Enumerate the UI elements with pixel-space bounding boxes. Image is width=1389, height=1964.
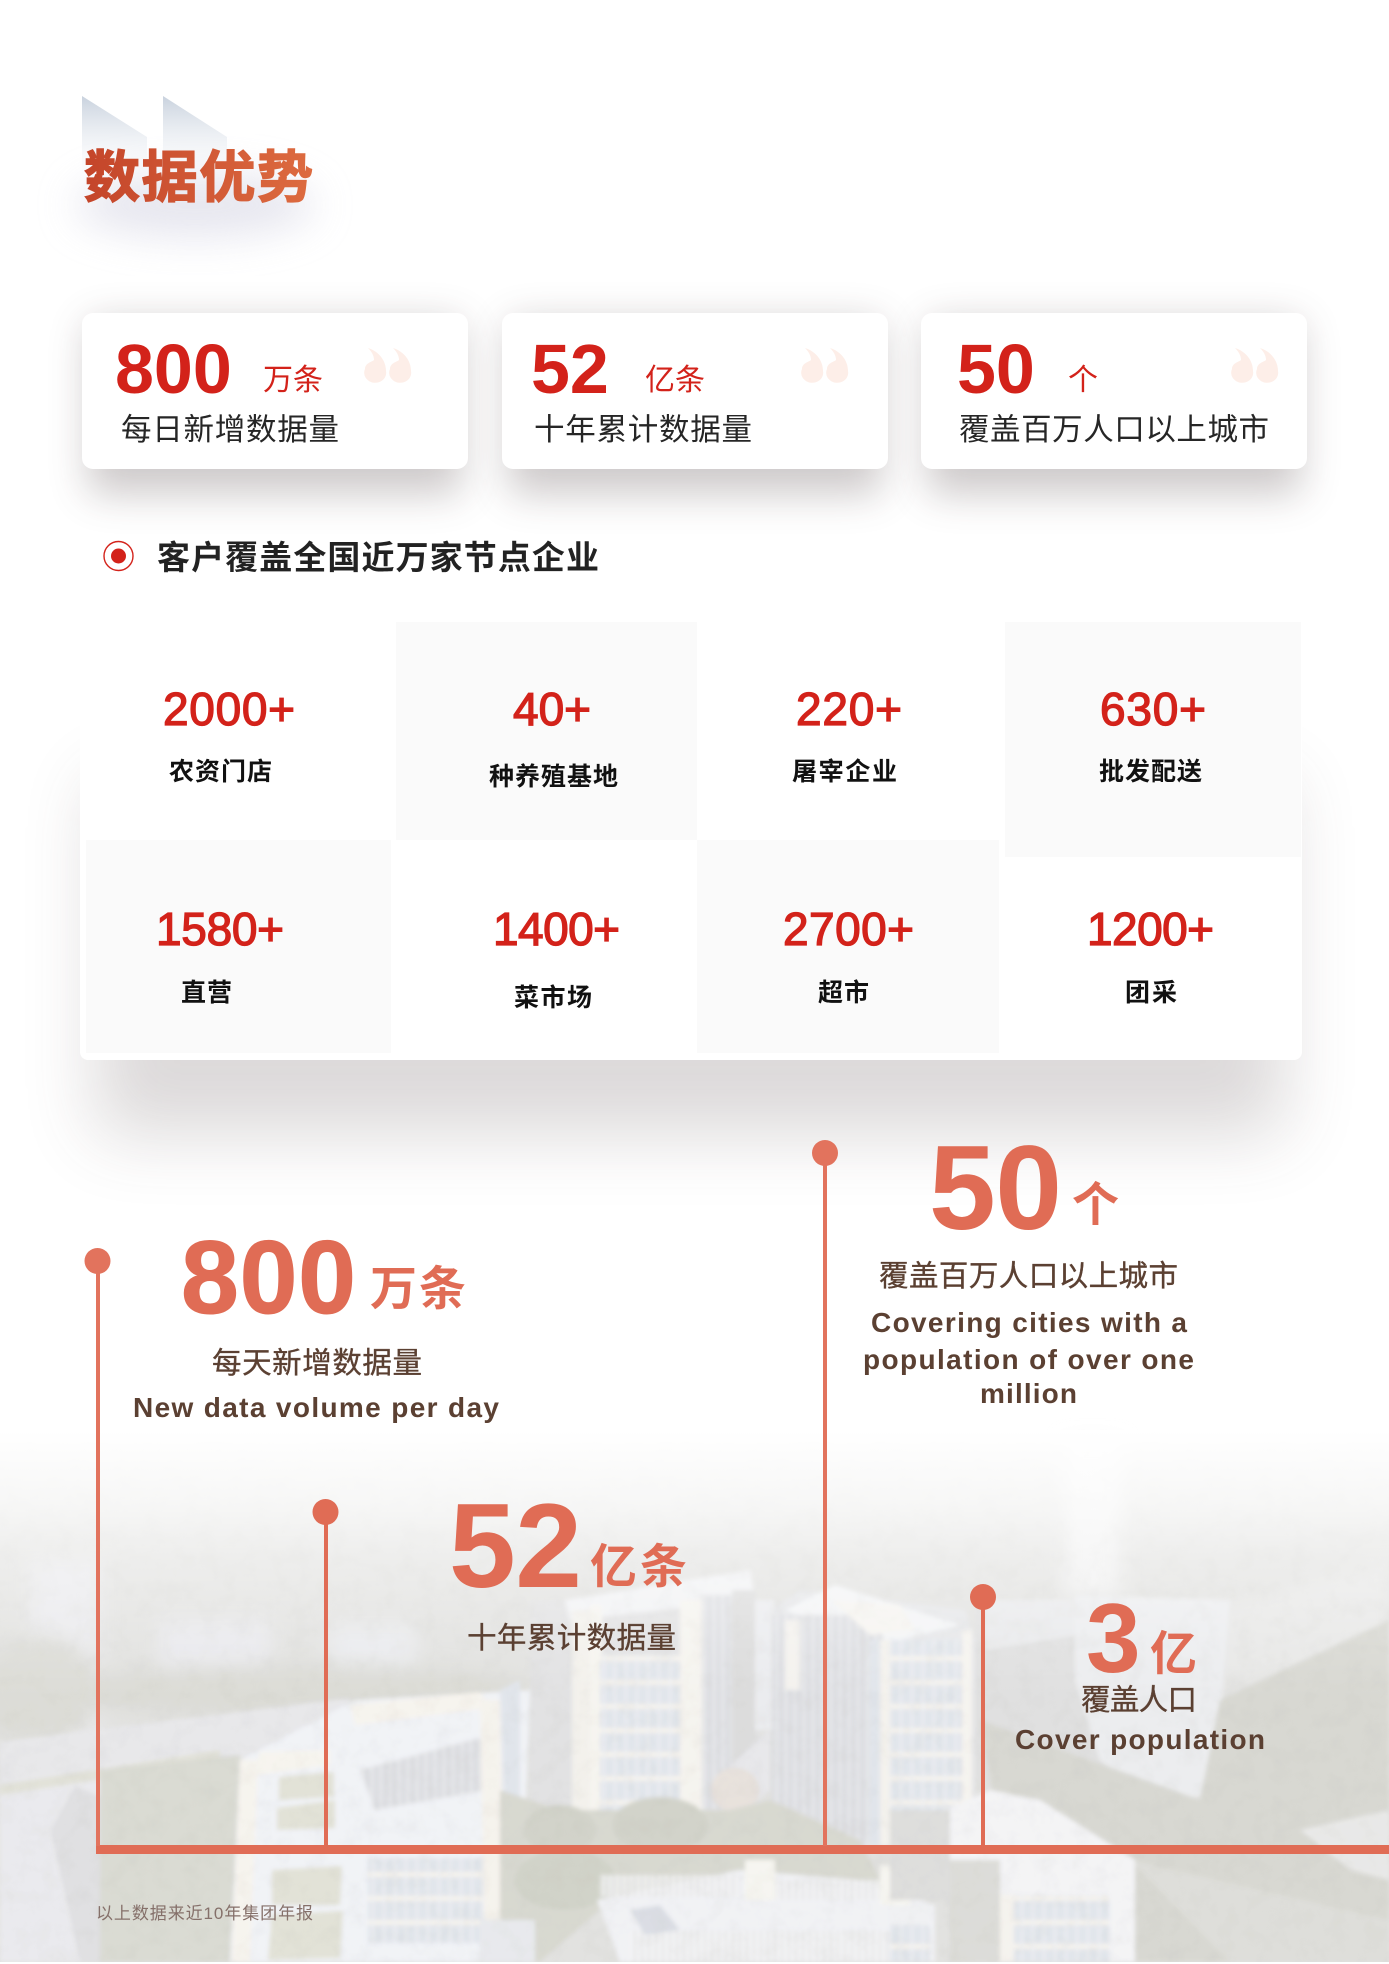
- caption en: Covering cities with a: [871, 1307, 1187, 1338]
- cell: 屠宰企业: 220+: [796, 683, 902, 735]
- stat number: 52: [531, 330, 609, 408]
- cell: 屠宰企业: [792, 683, 902, 786]
- card label: 覆盖百万人口以上城市: [959, 413, 1269, 447]
- big number: 52: [449, 1479, 582, 1613]
- caption cn: 覆盖百万人口以上城市: [879, 1260, 1178, 1293]
- cell: 屠宰企业: 屠宰企业: [792, 757, 897, 786]
- caption en: Cover population: [1015, 1724, 1265, 1755]
- stat: 3亿: [1015, 1583, 1265, 1755]
- low building: [230, 1690, 530, 1962]
- caption cn: 覆盖人口: [1081, 1684, 1197, 1717]
- stat number: 50: [957, 330, 1035, 408]
- caption en: New data volume per day: [133, 1392, 499, 1423]
- unit: 万条: [263, 364, 323, 397]
- footnote: 以上数据来近10年集团年报: [96, 1904, 313, 1923]
- road: [0, 1698, 360, 1785]
- panel: card 800万条: [82, 313, 468, 469]
- right trees: [980, 1620, 1389, 1962]
- lower left tower: [0, 1780, 130, 1962]
- card label: 每日新增数据量: [121, 413, 339, 447]
- cell: 农资门店: [163, 683, 295, 786]
- cell: 种养殖基地: [489, 683, 618, 791]
- marker: 3: [970, 1584, 996, 1846]
- panel: enterprise coverage grid: [80, 622, 1302, 1060]
- cell: 批发配送: 630+: [1100, 683, 1206, 735]
- cell: 农资门店: 2000+: [163, 683, 295, 735]
- cell: 团采: 团采: [1125, 979, 1177, 1007]
- stat: 50个: [863, 1121, 1194, 1409]
- icon: quote mark: [1231, 348, 1278, 383]
- stat: 800万条: [133, 1220, 499, 1423]
- big number: 50: [929, 1121, 1062, 1255]
- heading text: 客户覆盖全国近万家节点企业: [157, 539, 599, 576]
- tower 2: [772, 1590, 975, 1850]
- base trees: [500, 1790, 880, 1962]
- cell: 直营: 直营: [181, 979, 232, 1007]
- cell: 菜市场: 菜市场: [514, 984, 592, 1012]
- cell: 种养殖基地: 种养殖基地: [489, 763, 618, 791]
- cell: 团采: 1200+: [1087, 903, 1214, 955]
- lower right building: [935, 1790, 1135, 1962]
- unit: 亿: [1150, 1627, 1197, 1680]
- panel shadow: [95, 780, 1285, 1135]
- cell: 团采: [1087, 903, 1214, 1007]
- caption cn: 每天新增数据量: [212, 1347, 422, 1380]
- title shadow glow: [75, 173, 315, 237]
- cell: 菜市场: 1400+: [493, 903, 620, 955]
- cell: 超市: [783, 903, 914, 1007]
- cell: 菜市场: [493, 903, 620, 1012]
- timeline chart: [84, 1140, 1389, 1854]
- caption en: million: [980, 1378, 1077, 1409]
- cell: 直营: 1580+: [156, 903, 284, 955]
- far haze layer: [0, 1440, 1389, 1750]
- tower 1: [530, 1600, 760, 1830]
- caption en: population of over one: [863, 1344, 1194, 1375]
- marker: 800: [84, 1248, 110, 1846]
- cell: 批发配送: 批发配送: [1099, 758, 1202, 786]
- cell: 超市: 2700+: [783, 903, 914, 955]
- section heading: [104, 539, 599, 576]
- icon: double wedge marks: [82, 96, 227, 175]
- unit: 亿条: [590, 1540, 687, 1593]
- unit: 万条: [370, 1262, 466, 1315]
- alternating cells: [86, 622, 1301, 1053]
- big number: 800: [181, 1220, 356, 1336]
- trees lower left: [100, 1755, 250, 1962]
- caption cn: 十年累计数据量: [467, 1622, 676, 1655]
- caption en: [863, 1307, 1194, 1409]
- marker: 50: [812, 1140, 838, 1846]
- behind right: [975, 1600, 1175, 1780]
- cell: 超市: 超市: [818, 979, 869, 1007]
- bottom centre buildings: [597, 1870, 935, 1962]
- cell: 直营: [156, 903, 284, 1007]
- baseline bar: [96, 1845, 1389, 1854]
- cell: 种养殖基地: 40+: [513, 683, 591, 735]
- title text: 数据优势: [84, 146, 313, 209]
- unit: 亿条: [645, 364, 705, 397]
- icon: quote mark: [801, 348, 848, 383]
- stat number: 800: [115, 330, 232, 408]
- cell: 批发配送: [1099, 683, 1206, 786]
- title block: [75, 96, 315, 237]
- unit: 个: [1068, 364, 1098, 397]
- card label: 十年累计数据量: [534, 413, 752, 447]
- icon: red target bullet: [104, 542, 133, 570]
- background photo: aerial view of office campus: [0, 1430, 1389, 1964]
- card shadows: [88, 322, 1301, 494]
- panel: card 50个: [921, 313, 1307, 469]
- marker: 52: [312, 1499, 338, 1846]
- cell: 农资门店: 农资门店: [169, 758, 272, 786]
- icon: quote mark: [364, 348, 411, 383]
- big number: 3: [1086, 1583, 1141, 1693]
- stat: 52亿条: [449, 1479, 687, 1655]
- unit: 个: [1072, 1178, 1119, 1231]
- panel: card 52亿条: [502, 313, 888, 469]
